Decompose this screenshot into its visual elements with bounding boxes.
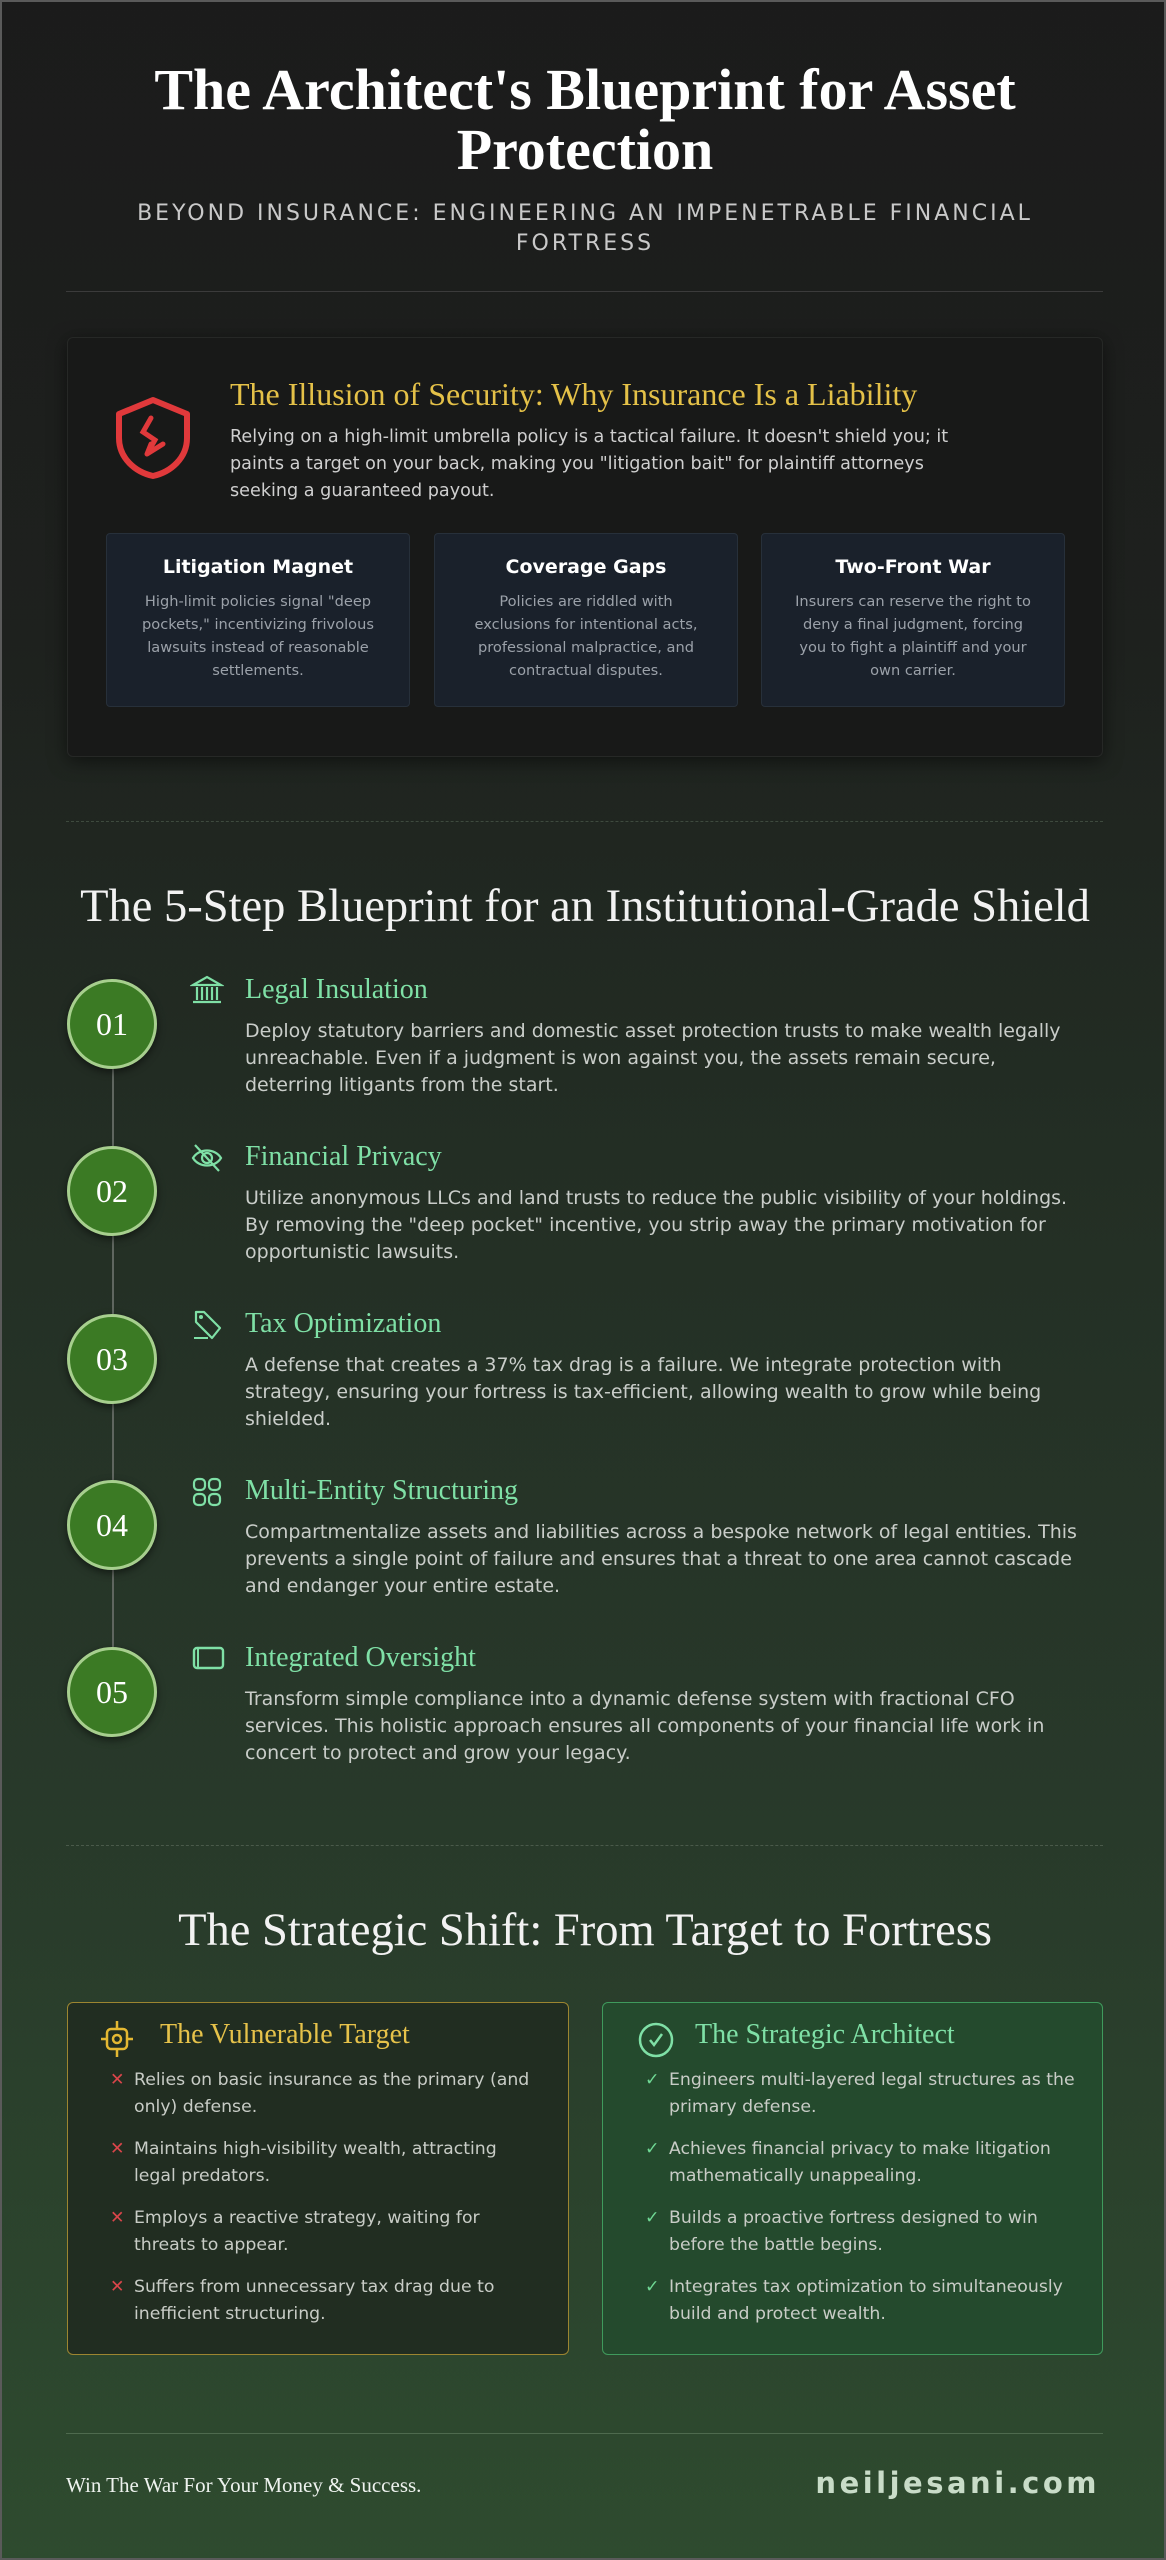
card: litigation magnet: High-limit policies signal "deep pockets," incentivizing frivolous lawsuits instead of reasonable settlements. (142, 593, 374, 679)
step 02: 02 (96, 1173, 128, 1209)
step title: legal insulation: Legal Insulation (245, 974, 428, 1005)
step title: integrated oversight: Integrated Oversight (245, 1642, 476, 1673)
step 02 (67, 1146, 157, 1236)
icon: broken shield (116, 397, 190, 479)
card: litigation magnet (106, 533, 410, 707)
list: strengths: Achieves financial privacy to make litigation mathematically unappealing. (669, 2139, 1051, 2186)
list: vulnerabilities: Employs a reactive strategy, waiting for threats to appear. (134, 2208, 480, 2255)
card: coverage gaps: Coverage Gaps (506, 556, 666, 578)
section heading: strategic shift: The Strategic Shift: From Target to Fortress (178, 1905, 992, 1956)
heading: The Strategic Architect (695, 2019, 955, 2050)
step 01 (67, 979, 157, 1069)
subtitle: FORTRESS (516, 231, 654, 256)
list: vulnerabilities: ✕ (110, 2277, 124, 2297)
step title: financial privacy: Financial Privacy (245, 1141, 442, 1172)
panel heading: The Illusion of Security: Why Insurance Is a Liability (230, 376, 917, 412)
list: strengths: Builds a proactive fortress designed to win before the battle begins. (669, 2208, 1038, 2255)
list: vulnerabilities: ✕ (110, 2208, 124, 2228)
timeline connector (112, 1032, 114, 1692)
footer tagline: Win The War For Your Money & Success. (66, 2473, 421, 2497)
list: strengths: Integrates tax optimization to simultaneously build and protect wealth. (669, 2277, 1063, 2324)
step 05: 05 (96, 1674, 128, 1710)
step 01: 01 (96, 1006, 128, 1042)
list: vulnerabilities: Suffers from unnecessary tax drag due to inefficient structuring. (134, 2277, 494, 2324)
card: two-front war: Two-Front War (835, 556, 991, 578)
footer brand: neiljesani.com (815, 2466, 1100, 2500)
step title: tax optimization: Tax Optimization (245, 1308, 441, 1339)
card: coverage gaps (434, 533, 738, 707)
subtitle: BEYOND INSURANCE: ENGINEERING AN IMPENETRABLE FINANCIAL (137, 201, 1033, 226)
panel: strategic architect (602, 2002, 1103, 2355)
list: strengths: ✓ (645, 2277, 659, 2297)
card: litigation magnet: Litigation Magnet (163, 556, 353, 578)
card: two-front war: Insurers can reserve the right to deny a final judgment, forcing you to fight a plaintiff and your own carrier. (795, 593, 1031, 679)
panel intro text: Relying on a high-limit umbrella policy is a tactical failure. It doesn't shield you; it paints a target on your back, making you "litigation bait" for plaintiff attorneys seeking a guaranteed payout. (230, 427, 948, 501)
text: Utilize anonymous LLCs and land trusts to reduce the public visibility of your holdings. By removing the "deep pocket" incentive, you strip away the primary motivation for opportunistic lawsuits. (245, 1187, 1067, 1263)
list: vulnerabilities (110, 2070, 529, 2324)
text: Compartmentalize assets and liabilities across a bespoke network of legal entities. This prevents a single point of failure and ensures that a threat to one area cannot cascade and endanger your entire estate. (245, 1521, 1077, 1597)
list: vulnerabilities: Relies on basic insurance as the primary (and only) defense. (134, 2070, 529, 2117)
section heading: 5-step blueprint: The 5-Step Blueprint for an Institutional-Grade Shield (80, 881, 1090, 932)
step 05 (67, 1647, 157, 1737)
title: Protection (457, 117, 713, 182)
step title: multi-entity structuring: Multi-Entity Structuring (245, 1475, 518, 1506)
list: strengths (645, 2070, 1075, 2324)
list: strengths: Engineers multi-layered legal structures as the primary defense. (669, 2070, 1075, 2117)
text: Deploy statutory barriers and domestic asset protection trusts to make wealth legally unreachable. Even if a judgment is won against you, the assets remain secure, deterring litigants from the start. (245, 1020, 1060, 1096)
step 03 (67, 1314, 157, 1404)
step 04: 04 (96, 1507, 128, 1543)
icon: check circle (638, 2022, 674, 2058)
title: The Architect's Blueprint for Asset (154, 57, 1016, 122)
step 04 (67, 1480, 157, 1570)
list: strengths: ✓ (645, 2070, 659, 2090)
panel: illusion of security (67, 337, 1103, 757)
list: strengths: ✓ (645, 2139, 659, 2159)
subtitle (137, 201, 1033, 256)
list: strengths: ✓ (645, 2208, 659, 2228)
text: Transform simple compliance into a dynamic defense system with fractional CFO services. This holistic approach ensures all components of your financial life work in concert to protect and grow your legacy. (245, 1688, 1044, 1764)
step 03: 03 (96, 1341, 128, 1377)
heading: The Vulnerable Target (160, 2019, 410, 2050)
card: two-front war (761, 533, 1065, 707)
card: coverage gaps: Policies are riddled with exclusions for intentional acts, professional malpractice, and contractual disputes. (474, 593, 698, 679)
text: A defense that creates a 37% tax drag is a failure. We integrate protection with strategy, ensuring your fortress is tax-efficient, allowing wealth to grow while being shielded. (245, 1354, 1041, 1430)
list: vulnerabilities: ✕ (110, 2139, 124, 2159)
panel: vulnerable target (67, 2002, 569, 2355)
list: vulnerabilities: ✕ (110, 2070, 124, 2090)
list: vulnerabilities: Maintains high-visibility wealth, attracting legal predators. (134, 2139, 497, 2186)
icon: crosshair target (101, 2021, 133, 2057)
title (154, 57, 1016, 182)
